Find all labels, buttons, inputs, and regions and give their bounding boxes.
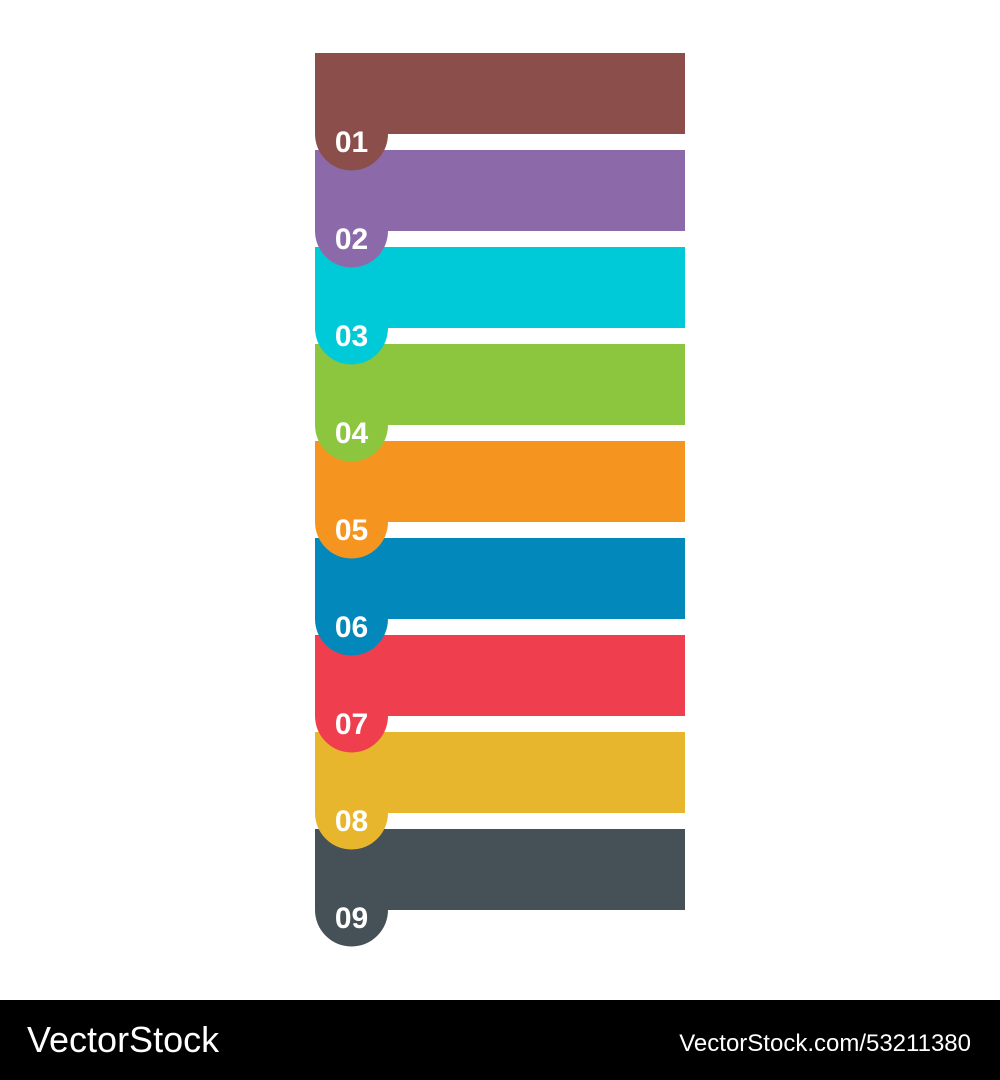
step 06 bbox=[315, 538, 685, 656]
step 09: 09 bbox=[335, 902, 368, 935]
step 08 bbox=[315, 732, 685, 849]
step 08: 08 bbox=[335, 805, 368, 838]
step 05: 05 bbox=[335, 514, 368, 547]
step 07 bbox=[315, 635, 685, 752]
footer id: VectorStock.com/53211380 bbox=[679, 1030, 971, 1057]
footer brand: VectorStock bbox=[27, 1019, 220, 1060]
step 05 bbox=[315, 441, 685, 558]
step 04 bbox=[315, 344, 685, 461]
step 04: 04 bbox=[335, 417, 368, 450]
footer bar bbox=[0, 1000, 1000, 1080]
step 02: 02 bbox=[335, 223, 368, 256]
step 02 bbox=[315, 150, 685, 268]
step 07: 07 bbox=[335, 708, 368, 741]
step 06: 06 bbox=[335, 611, 368, 644]
step 03: 03 bbox=[335, 320, 368, 353]
step 01: 01 bbox=[335, 126, 368, 159]
step 01 bbox=[315, 53, 685, 171]
step 03 bbox=[315, 247, 685, 364]
step 09 bbox=[315, 829, 685, 946]
